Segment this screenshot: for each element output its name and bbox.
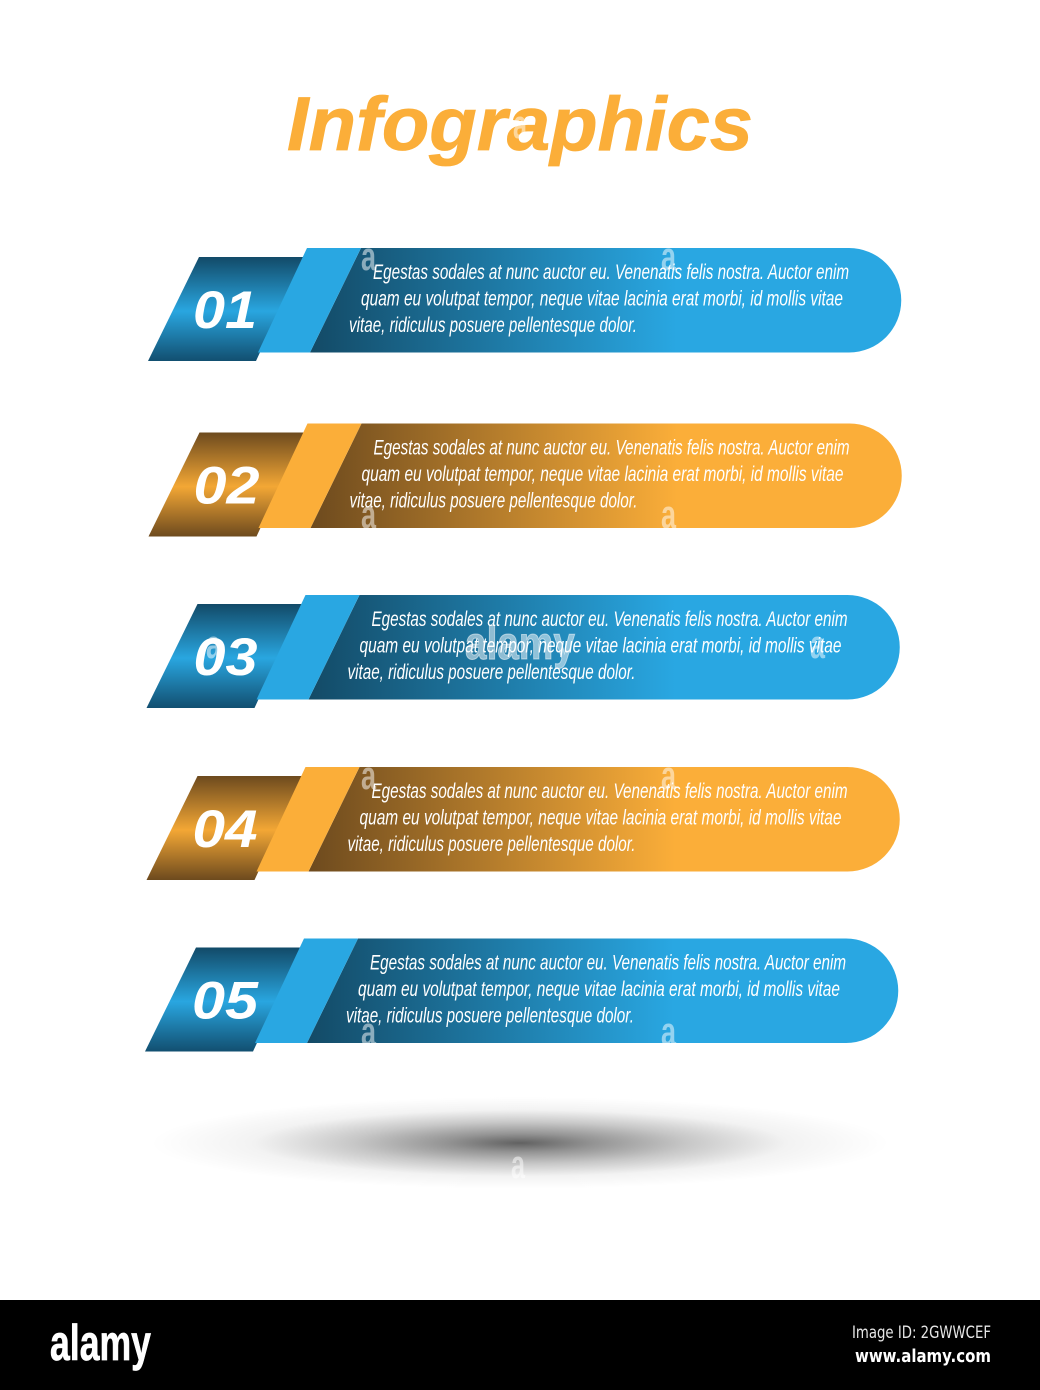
watermarks: a xyxy=(511,1143,525,1187)
number 01: 01 xyxy=(193,281,257,340)
fold 05 xyxy=(255,938,358,1043)
watermarks: alamy xyxy=(465,617,575,669)
banner 01 xyxy=(148,248,901,361)
number tab 03 xyxy=(146,604,302,708)
number 04: 04 xyxy=(192,800,258,859)
text band 01 xyxy=(310,248,901,352)
fold 01 xyxy=(258,248,361,352)
number 05: 05 xyxy=(192,972,260,1030)
description 02: quam eu volutpat tempor, neque vitae lacinia erat morbi, id mollis vitae xyxy=(362,462,844,486)
description 05: Egestas sodales at nunc auctor eu. Venenatis felis nostra. Auctor enim xyxy=(370,950,846,974)
watermarks: a xyxy=(661,754,677,798)
watermarks: a xyxy=(206,623,222,667)
drop shadow xyxy=(150,1097,890,1189)
website: www.alamy.com xyxy=(855,1347,991,1367)
watermarks: a xyxy=(661,235,677,279)
description 05: quam eu volutpat tempor, neque vitae lacinia erat morbi, id mollis vitae xyxy=(358,977,840,1001)
watermarks: a xyxy=(810,623,826,667)
watermarks: a xyxy=(661,493,677,537)
text band 03 xyxy=(308,595,900,700)
watermarks: a xyxy=(361,754,377,798)
description 04: Egestas sodales at nunc auctor eu. Venenatis felis nostra. Auctor enim xyxy=(372,779,848,803)
watermarks: a xyxy=(513,103,527,147)
footer logo: alamy xyxy=(50,1315,151,1371)
description 02: vitae, ridiculus posuere pellentesque dolor. xyxy=(350,488,638,512)
watermarks: a xyxy=(661,1010,677,1054)
fold 03 xyxy=(256,595,360,700)
description 03: quam eu volutpat tempor, neque vitae lacinia erat morbi, id mollis vitae xyxy=(360,634,842,658)
description 03: vitae, ridiculus posuere pellentesque dolor. xyxy=(348,660,636,684)
text band 05 xyxy=(307,938,898,1043)
watermarks: a xyxy=(361,493,377,537)
number tab 01 xyxy=(148,257,304,361)
description 04: vitae, ridiculus posuere pellentesque dolor. xyxy=(348,832,636,856)
description 03: Egestas sodales at nunc auctor eu. Venenatis felis nostra. Auctor enim xyxy=(372,607,848,631)
number 03: 03 xyxy=(194,628,258,687)
title: Infographics xyxy=(287,82,753,167)
image id: Image ID: 2GWWCEF xyxy=(852,1323,991,1342)
text band 04 xyxy=(308,767,900,872)
banner 04 xyxy=(146,767,900,880)
fold 02 xyxy=(258,424,362,528)
description 05: vitae, ridiculus posuere pellentesque dolor. xyxy=(346,1004,634,1028)
fold 04 xyxy=(256,767,360,872)
description 01: vitae, ridiculus posuere pellentesque dolor. xyxy=(349,313,637,337)
number tab 04 xyxy=(146,776,302,880)
number tab 05 xyxy=(145,948,301,1052)
banner 05 xyxy=(145,938,898,1052)
number tab 02 xyxy=(148,432,304,536)
description 01: Egestas sodales at nunc auctor eu. Venenatis felis nostra. Auctor enim xyxy=(373,260,849,284)
watermarks: a xyxy=(361,1010,377,1054)
text band 02 xyxy=(310,424,902,528)
watermarks xyxy=(206,103,826,1187)
banner 03 xyxy=(146,595,900,708)
watermarks: a xyxy=(361,235,377,279)
footer bar xyxy=(0,1300,1040,1390)
banner 02 xyxy=(148,424,902,536)
description 02: Egestas sodales at nunc auctor eu. Venenatis felis nostra. Auctor enim xyxy=(374,436,850,460)
number 02: 02 xyxy=(194,456,260,516)
description 04: quam eu volutpat tempor, neque vitae lacinia erat morbi, id mollis vitae xyxy=(360,806,842,830)
description 01: quam eu volutpat tempor, neque vitae lacinia erat morbi, id mollis vitae xyxy=(361,286,843,310)
